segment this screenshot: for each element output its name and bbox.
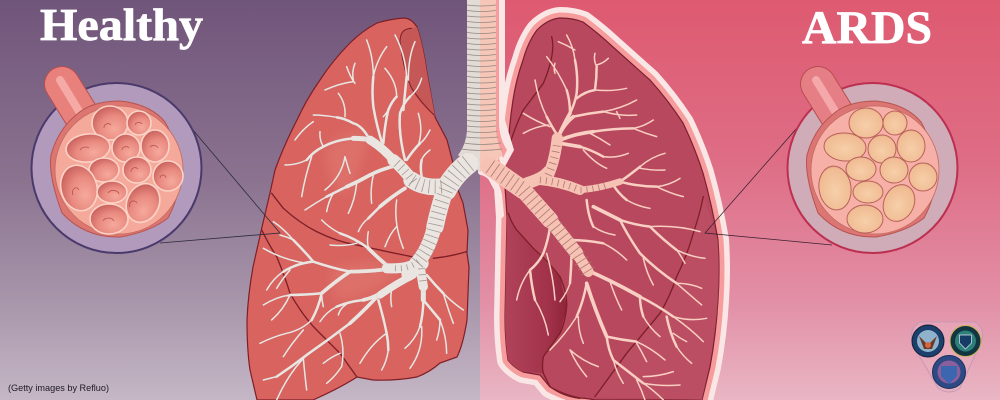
image credit: (Getty images by Refluo) [8,383,109,394]
lobe fissures [508,37,703,398]
ARDS main bronchus [490,138,620,272]
seal backing [912,322,983,392]
lobe fissures [262,28,467,377]
dark pocket [505,213,567,373]
agency seals [912,322,983,392]
lung highlights [325,132,400,300]
background: ARDS side [480,0,1000,400]
pink halo ring [497,18,719,400]
lower lobe lighter tone [595,195,719,400]
tracheal rings [461,5,502,150]
cluster base lobes [50,101,181,237]
healthy trachea [458,0,480,172]
airway branches [517,35,707,400]
seal: bottom [932,356,966,388]
title: ARDS: ARDS [802,2,932,54]
ARDS lung [497,18,719,400]
cluster base lobes [806,101,937,237]
bronchiole tube [818,84,844,126]
bronchiole tube fill [818,84,844,126]
alveolar sacs [56,106,183,234]
cluster surface [55,106,183,234]
airway: ARDS half [458,0,620,272]
lung silhouette [247,18,469,400]
background: healthy side [0,0,480,400]
healthy lung [247,18,469,400]
healthy main bronchus [370,140,468,295]
halo under right main bronchus [481,172,501,215]
inset circle [32,83,202,253]
airway branches [260,35,463,400]
inset: ARDS alveoli [788,80,958,253]
inset circle [788,83,958,253]
outer white halo [497,18,719,400]
white halo beside trachea [496,0,514,170]
seal: right [950,326,981,356]
tube highlight [60,80,88,126]
bronchiole tube [62,84,88,126]
airway: healthy half [366,0,480,299]
bronchiole tube fill [62,84,88,126]
leader lines: ARDS [705,128,832,245]
leader lines: healthy [160,130,280,243]
seal: left [912,325,944,357]
medial fold shading [400,27,435,116]
cluster surface [811,106,939,234]
fluid-filled alveolar sacs [816,108,937,233]
ARDS trachea [480,0,503,172]
title: Healthy: Healthy [40,0,203,50]
inset: healthy alveoli [32,80,202,253]
tube highlight [816,80,844,126]
pink band beside trachea [495,0,507,158]
trachea and main bronchi [370,0,620,295]
lung body [497,18,719,400]
